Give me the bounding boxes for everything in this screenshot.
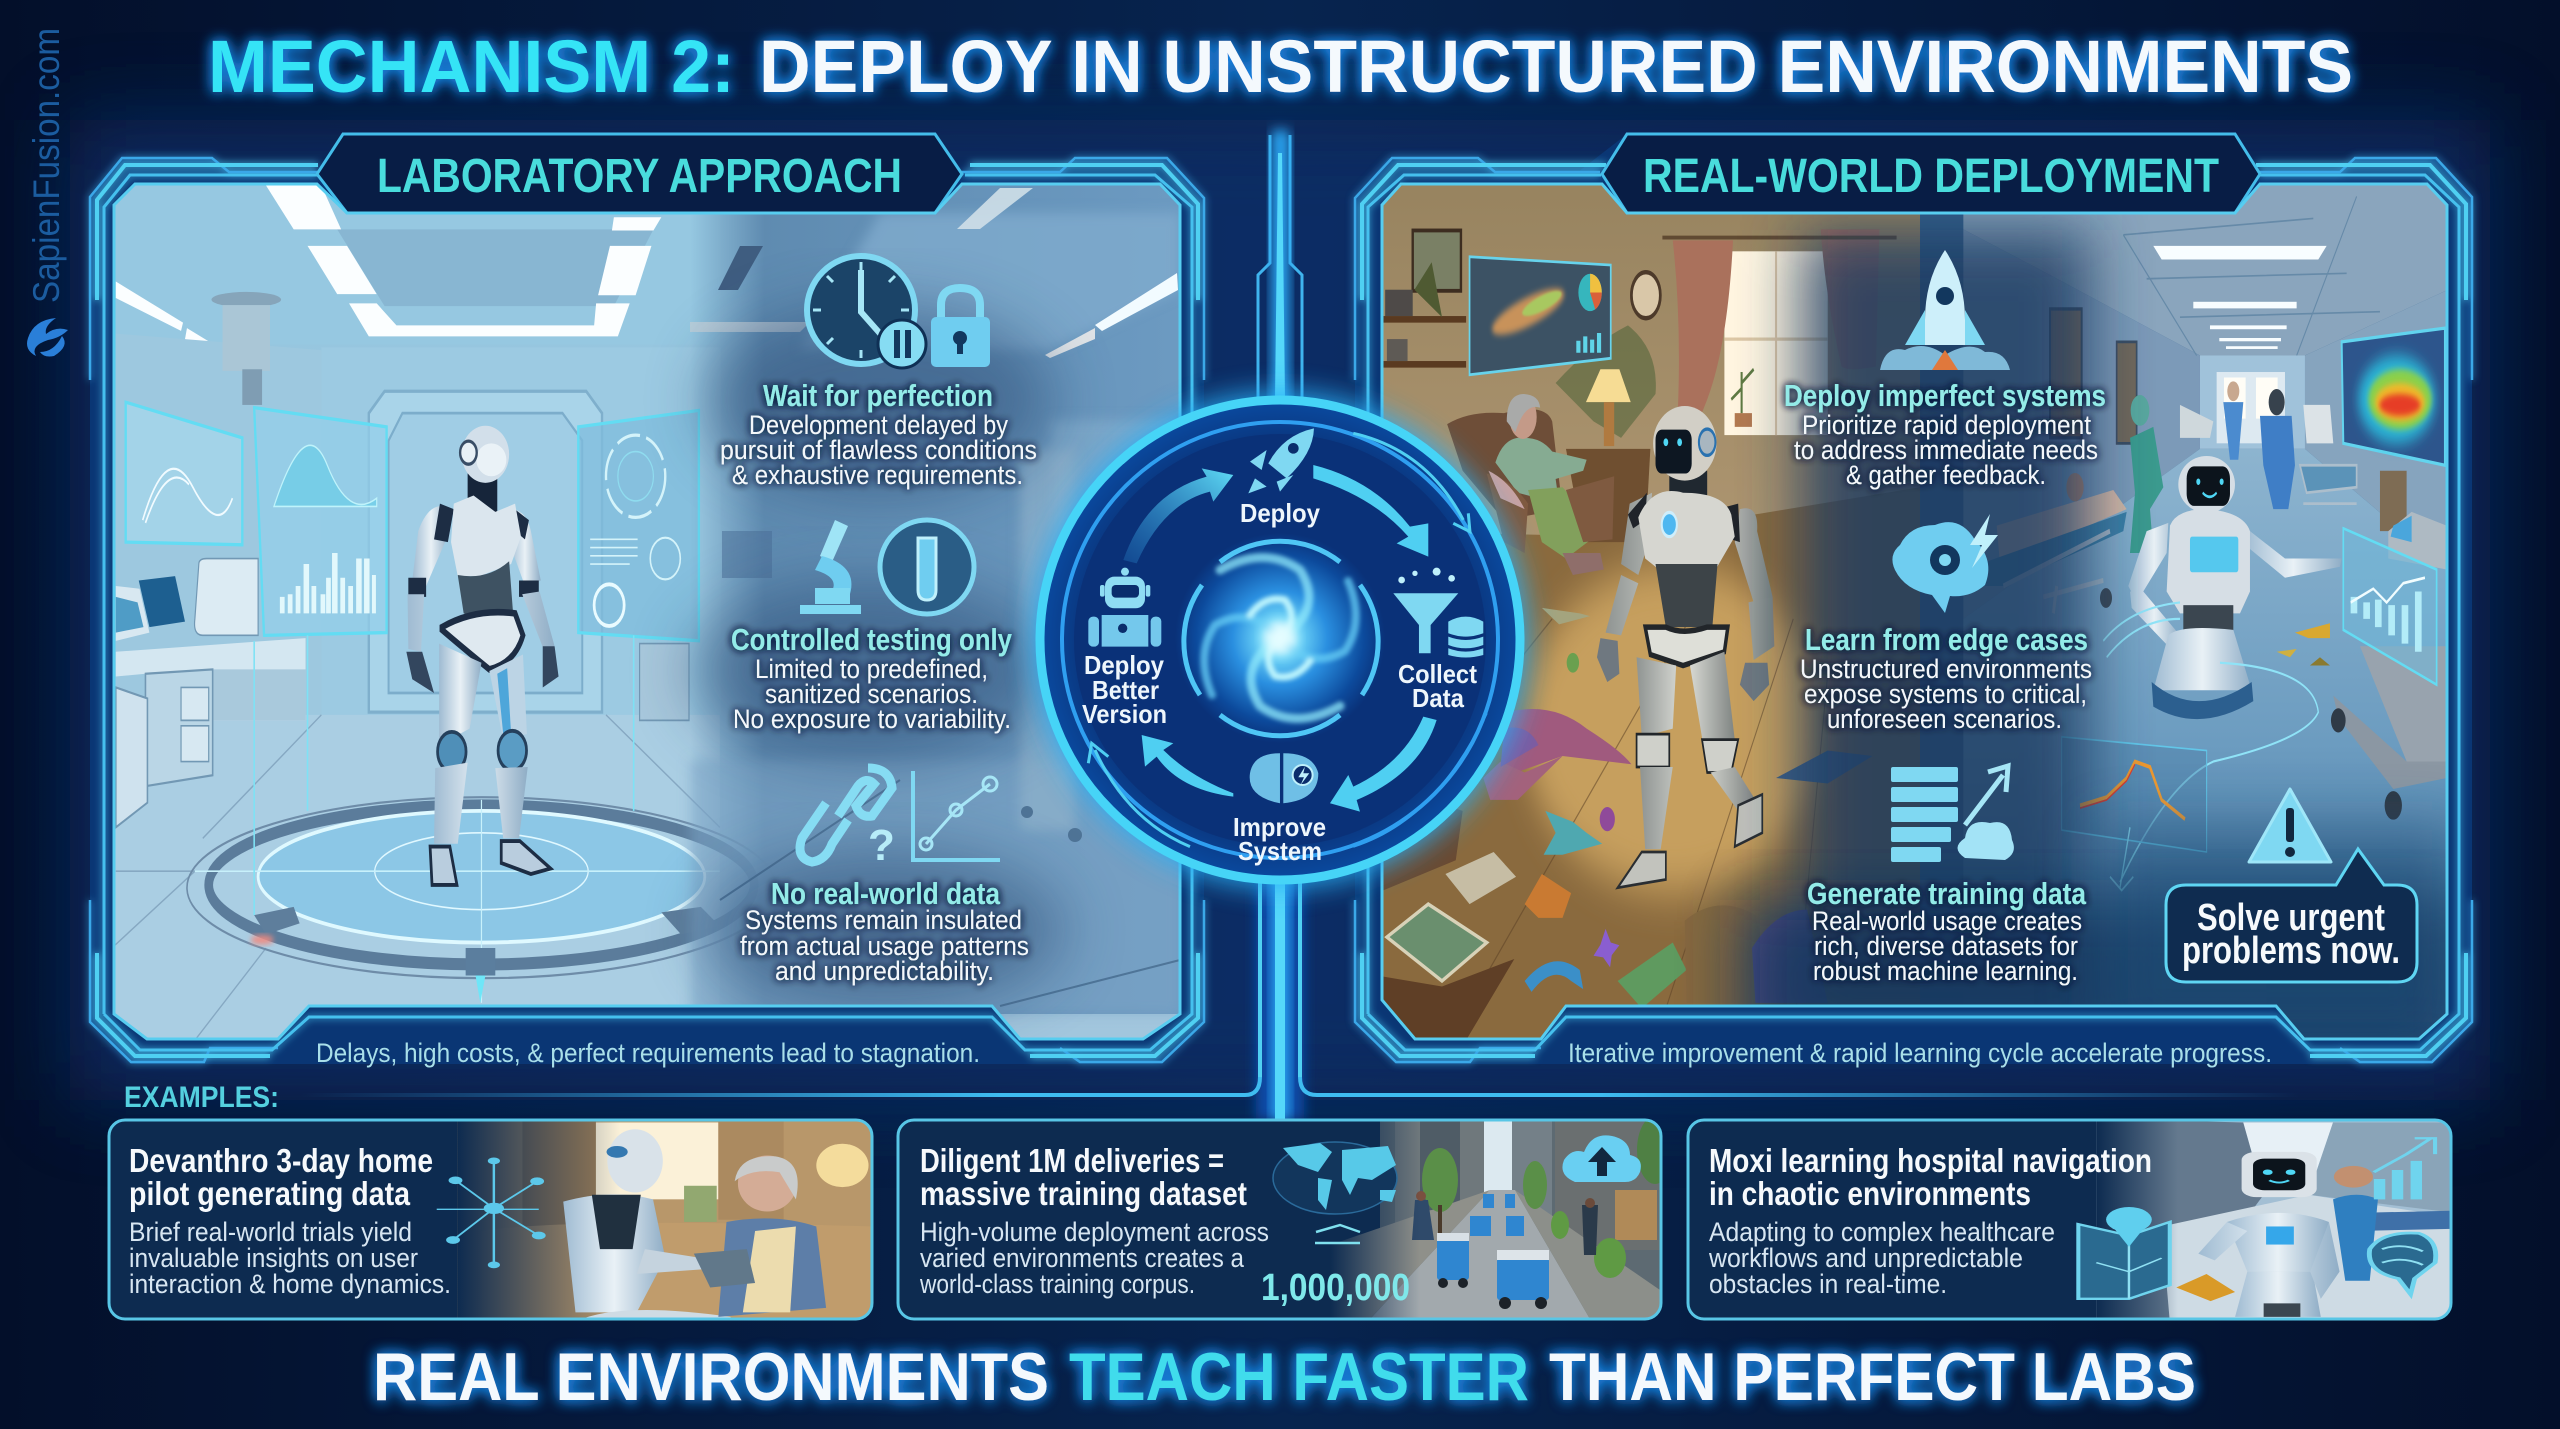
spill — [2176, 1274, 2235, 1301]
robot — [2227, 1213, 2329, 1272]
ceiling lights — [2153, 246, 2327, 349]
holographic screen: radial dials — [578, 410, 699, 641]
card text: Brief real-world trials yield — [129, 1217, 412, 1247]
card illustration: hospital robot — [2078, 1120, 2455, 1321]
card text — [919, 1142, 1269, 1299]
text: wait for perfection: & exhaustive requirements. — [732, 460, 1023, 490]
step: deploy — [1240, 428, 1320, 528]
trees and pedestrians — [1412, 1116, 1673, 1278]
card text: Adapting to complex healthcare — [1709, 1217, 2055, 1247]
nurse — [2333, 1195, 2378, 1281]
network icon — [437, 1158, 544, 1268]
text: wait for perfection: Wait for perfection — [763, 378, 993, 413]
panel frame — [90, 134, 1204, 1064]
text: learn from edge cases: Learn from edge cases — [1805, 622, 2088, 657]
medical cart and chart screen — [2331, 512, 2447, 820]
card illustration: robot and elderly woman — [437, 1120, 873, 1321]
text: generate training data: robust machine learning. — [1813, 956, 2078, 986]
heatmap screen — [2342, 328, 2445, 465]
platform rings — [187, 635, 776, 1003]
panel heading tab — [1602, 134, 2260, 213]
icon: microscope and test tube — [800, 520, 974, 614]
card text: Moxi learning hospital navigation — [1709, 1142, 2152, 1179]
step: deploy: Deploy — [1240, 498, 1320, 528]
text: wait for perfection: Development delayed by — [749, 410, 1008, 440]
text darkening overlays — [1740, 230, 2460, 1070]
cycle diagram — [1032, 392, 1528, 888]
text: no real-world data: from actual usage patterns — [740, 931, 1029, 961]
text: deploy imperfect systems: Deploy imperfect systems — [1784, 378, 2106, 413]
desk and cabinets — [116, 638, 306, 676]
icon: server, cloud and growth — [1891, 766, 2014, 862]
heading: examples: EXAMPLES: — [124, 1081, 279, 1114]
card text: varied environments creates a — [920, 1243, 1245, 1273]
step: deploy better version — [1082, 568, 1167, 729]
ceiling — [100, 180, 720, 345]
staff in corridor — [2130, 381, 2333, 553]
icon: rocket launch — [1880, 250, 2010, 370]
houseplant behind lamp — [1556, 325, 1656, 438]
icon: broken chain and chart: ? — [868, 821, 895, 870]
title: MECHANISM 2: — [208, 25, 735, 108]
text: wait for perfection — [720, 378, 1037, 490]
text: generate training data — [1807, 876, 2087, 986]
icon: clock, pause and lock — [807, 256, 990, 368]
deployed home robot — [1597, 406, 1774, 888]
step: improve system: System — [1238, 836, 1322, 866]
card text: Devanthro 3-day home — [129, 1142, 433, 1179]
callout: solve urgent problems now — [2166, 849, 2417, 982]
icon: brain with bolt — [1250, 753, 1318, 803]
icon: broken chain and chart — [800, 768, 1000, 870]
icon: warning triangle — [2249, 789, 2331, 862]
inner border — [114, 184, 1180, 1039]
card: Devanthro home pilot — [109, 1120, 873, 1321]
floor — [100, 715, 720, 1040]
world map — [1273, 1142, 1397, 1243]
inner border — [1382, 184, 2447, 1039]
step: collect data: Data — [1412, 683, 1464, 713]
item: generate training data — [1807, 766, 2087, 986]
text: learn from edge cases — [1800, 622, 2092, 734]
elderly woman in armchair — [1447, 394, 1614, 575]
card text: pilot generating data — [129, 1175, 411, 1212]
card text: workflows and unpredictable — [1708, 1243, 2023, 1273]
wall frame and shelves — [1413, 230, 1461, 291]
callout: solve urgent problems now: Solve urgent — [2197, 897, 2385, 939]
holographic screen: graph and bars — [254, 408, 387, 635]
text: learn from edge cases: Unstructured environments — [1800, 654, 2092, 684]
central swirl — [1175, 533, 1385, 743]
laboratory robot — [406, 426, 559, 885]
panel: laboratory approach — [90, 134, 1204, 1068]
step: improve system — [1233, 753, 1326, 866]
corridor end — [2200, 356, 2305, 449]
text: controlled testing: sanitized scenarios. — [765, 679, 978, 709]
hospital robot — [2103, 456, 2342, 882]
lamp and table — [1586, 369, 1631, 402]
floor spill — [2295, 623, 2330, 638]
woman — [718, 1218, 826, 1317]
item: no real-world data — [740, 768, 1029, 986]
panel heading tab — [317, 134, 962, 213]
caption: laboratory outcome: Delays, high costs, & perfect requirements lead to stagnation. — [316, 1038, 980, 1068]
home interior — [1377, 175, 1920, 1047]
bottom tagline — [373, 1339, 2196, 1415]
bottom tagline: TEACH FASTER — [1069, 1339, 1529, 1415]
text: deploy imperfect systems: to address immediate needs — [1794, 435, 2098, 465]
plant in window — [1735, 413, 1752, 427]
text: controlled testing: Controlled testing only — [731, 622, 1013, 657]
step: collect data — [1393, 568, 1483, 713]
robot — [563, 1194, 665, 1312]
text: generate training data: rich, diverse datasets for — [1814, 931, 2078, 961]
text: deploy imperfect systems: & gather feedback. — [1846, 460, 2046, 490]
icon: brain with gear and bolt — [1892, 514, 1998, 613]
blanket and toys — [1377, 608, 1872, 1040]
panel frame — [1355, 134, 2472, 1064]
delivery robots — [1437, 1194, 1549, 1309]
card text: massive training dataset — [920, 1175, 1247, 1212]
card text — [129, 1142, 451, 1299]
icon: robot — [1088, 568, 1161, 647]
callout: solve urgent problems now: problems now. — [2182, 930, 2400, 972]
wall clock — [1631, 272, 1660, 318]
holographic screen: line chart — [126, 402, 242, 545]
card text: obstacles in real-time. — [1709, 1269, 1947, 1299]
step: deploy better version: Version — [1082, 699, 1167, 729]
text: learn from edge cases: unforeseen scenarios. — [1827, 704, 2062, 734]
ceiling lights — [116, 186, 662, 341]
step: deploy better version: Better — [1092, 675, 1159, 705]
graph overlay — [2062, 737, 2207, 890]
brand: SapienFusion vertical mark: SapienFusion.com — [26, 28, 67, 303]
back wall and door — [185, 339, 218, 356]
ring — [1032, 392, 1528, 888]
title: DEPLOY IN UNSTRUCTURED ENVIRONMENTS — [759, 25, 2353, 108]
data screen — [1470, 257, 1611, 375]
step: collect data: Collect — [1398, 659, 1477, 689]
text: controlled testing: Limited to predefined, — [755, 654, 988, 684]
icon: funnel and database — [1393, 568, 1483, 657]
map, chart and brain icons — [2078, 1138, 2436, 1299]
street — [1370, 1190, 1590, 1319]
card: Diligent deliveries — [898, 1116, 1673, 1319]
right side of lab under text — [690, 184, 1185, 1014]
text: wait for perfection: pursuit of flawless conditions — [720, 435, 1037, 465]
card text: in chaotic environments — [1709, 1175, 2031, 1212]
item: controlled testing — [731, 520, 1013, 734]
cycle arrows — [1088, 433, 1487, 847]
window and curtains — [1724, 251, 1828, 435]
text: no real-world data: and unpredictability. — [775, 956, 994, 986]
item: wait for perfection — [720, 256, 1037, 490]
panel: real-world deployment — [1355, 134, 2472, 1070]
stretcher with patient — [1980, 465, 2357, 613]
card text: Diligent 1M deliveries = — [920, 1142, 1224, 1179]
caption: real-world outcome: Iterative improvement & rapid learning cycle accelerate progress. — [1568, 1038, 2272, 1068]
ceiling lamp — [211, 292, 281, 405]
panel heading tab: LABORATORY APPROACH — [377, 150, 902, 203]
card text: world-class training corpus. — [919, 1269, 1195, 1299]
central divider and enclosing frame — [300, 130, 2300, 1120]
card: Moxi hospital navigation — [1688, 1120, 2455, 1321]
bottom tagline: THAN PERFECT LABS — [1549, 1339, 2196, 1415]
card text: invaluable insights on user — [129, 1243, 418, 1273]
text: deploy imperfect systems — [1784, 378, 2106, 490]
icon: rocket — [1248, 428, 1314, 493]
panel heading tab: REAL-WORLD DEPLOYMENT — [1643, 150, 2219, 203]
card illustration: delivery robots in city — [1273, 1116, 1673, 1319]
text: learn from edge cases: expose systems to critical, — [1804, 679, 2087, 709]
text: controlled testing: No exposure to variability. — [733, 704, 1011, 734]
text: deploy imperfect systems: Prioritize rapid deployment — [1802, 410, 2091, 440]
real-world scene — [1370, 170, 2460, 1070]
text: generate training data: Generate training data — [1807, 876, 2087, 911]
cloud upload — [1562, 1135, 1641, 1182]
step: deploy better version: Deploy — [1084, 650, 1164, 680]
hospital corridor — [1963, 175, 2460, 1040]
text: no real-world data: Systems remain insulated — [745, 905, 1022, 935]
card text — [1708, 1142, 2152, 1299]
statistic: 1,000,000: 1,000,000 — [1261, 1267, 1410, 1309]
bottom tagline: REAL ENVIRONMENTS — [373, 1339, 1049, 1415]
buildings and sky — [1380, 1120, 1665, 1319]
text: controlled testing — [731, 622, 1013, 734]
text: generate training data: Real-world usage creates — [1812, 906, 2082, 936]
card text: High-volume deployment across — [920, 1217, 1269, 1247]
text: no real-world data: No real-world data — [771, 876, 1001, 911]
laboratory scene — [100, 170, 1190, 1060]
item: learn from edge cases — [1800, 514, 2092, 734]
item: deploy imperfect systems — [1784, 250, 2106, 490]
text: no real-world data — [740, 876, 1029, 986]
card text: interaction & home dynamics. — [129, 1269, 451, 1299]
step: improve system: Improve — [1233, 812, 1326, 842]
